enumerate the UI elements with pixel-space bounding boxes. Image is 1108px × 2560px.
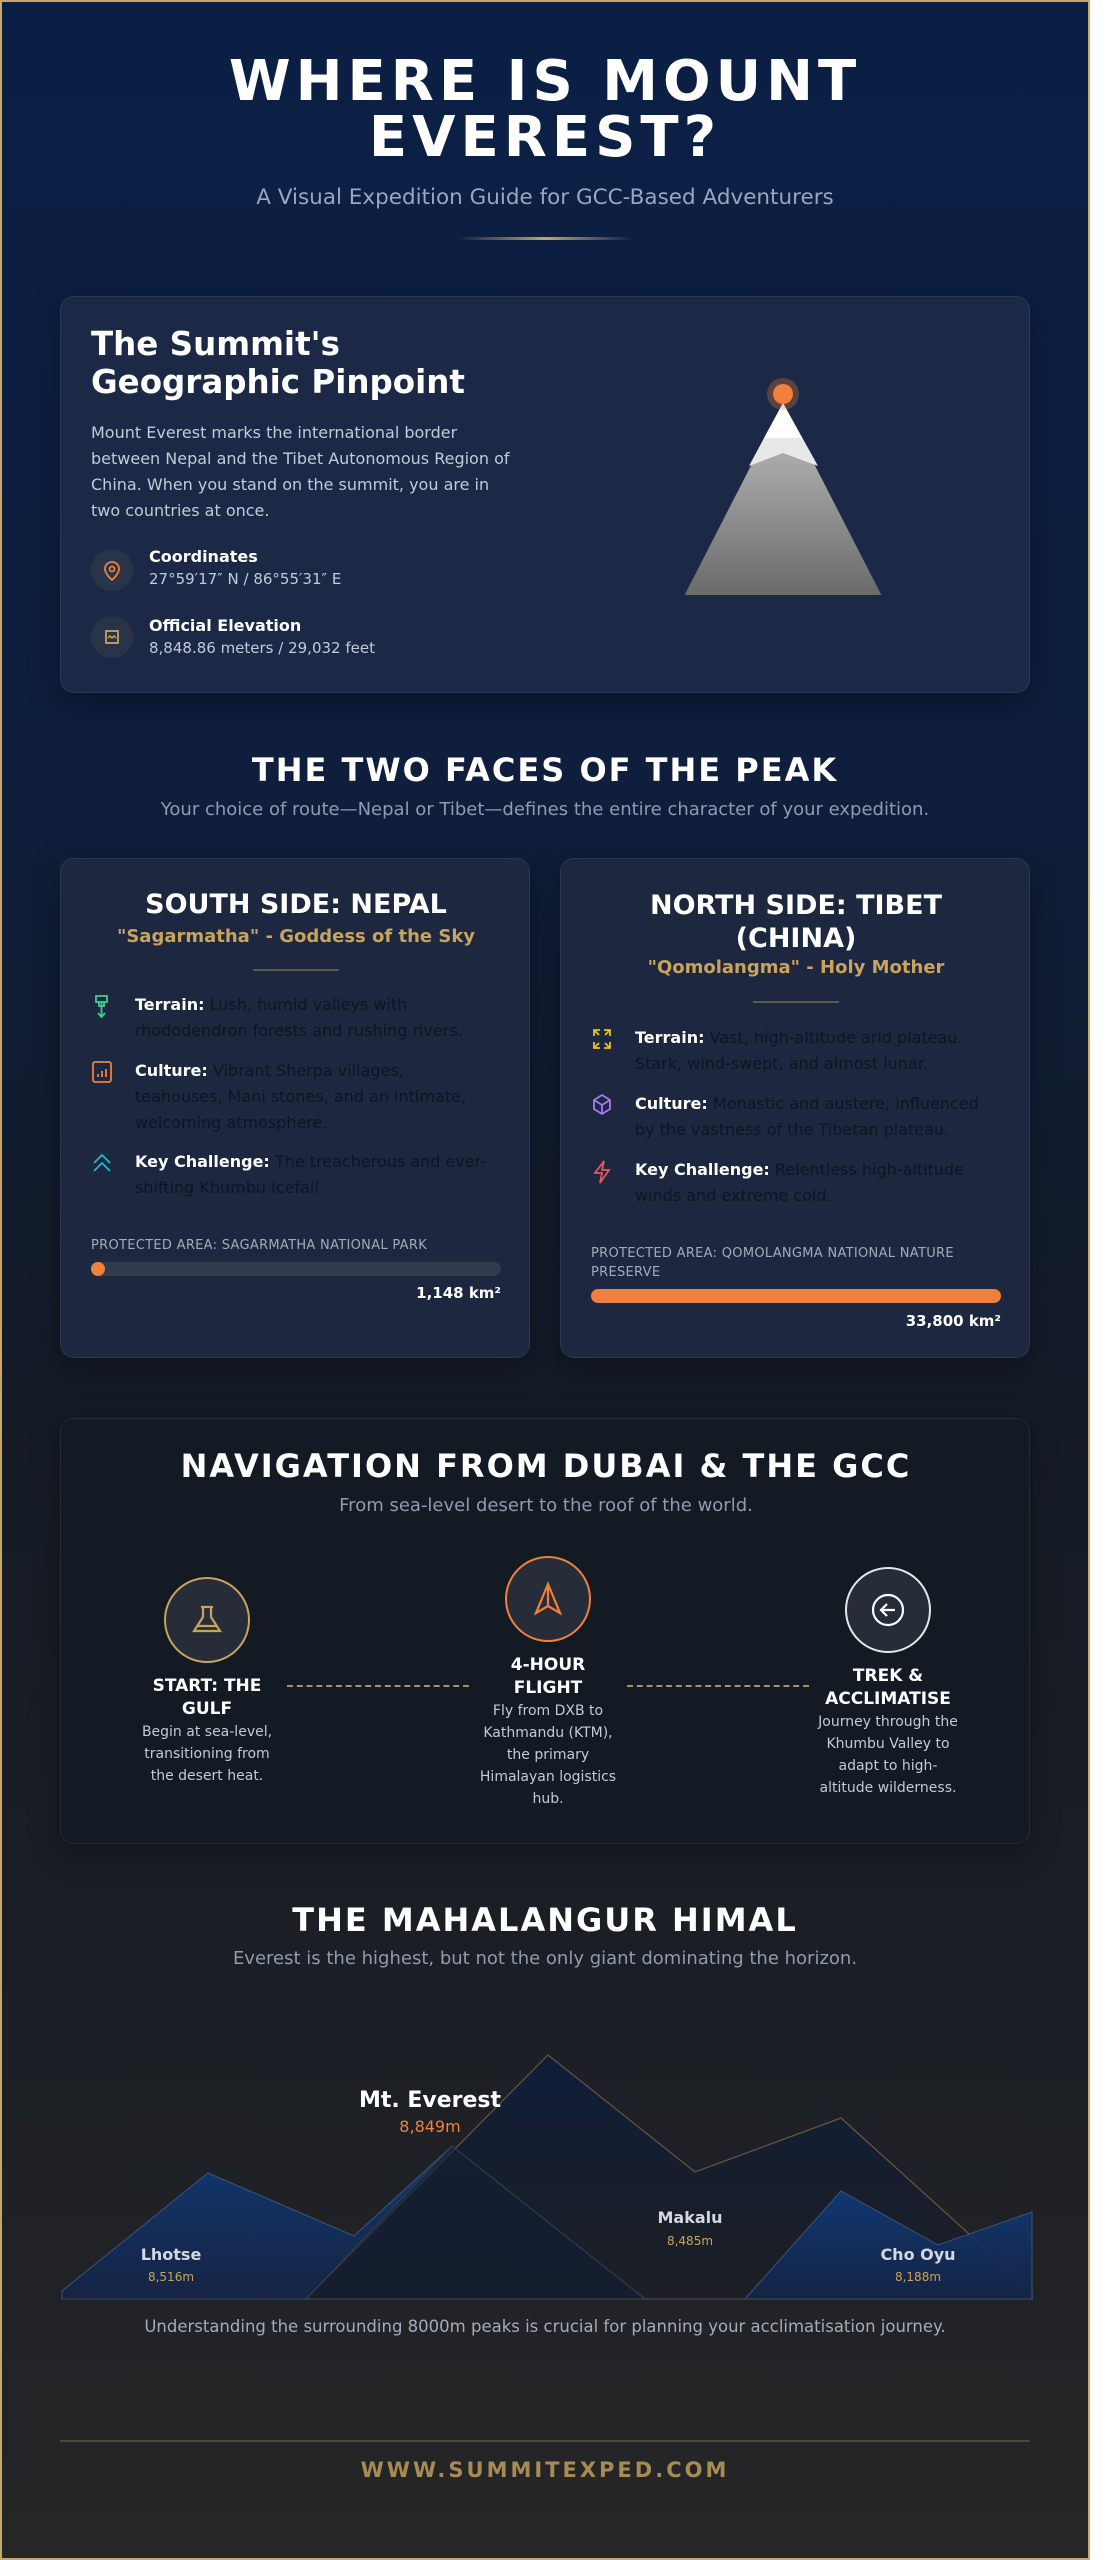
- heading: Geographic Pinpoint: [91, 363, 465, 401]
- heading: [91, 325, 465, 401]
- step: start the gulf: START: THE GULF: [153, 1676, 261, 1719]
- heading: The Summit's: [91, 325, 340, 363]
- peak: makalu: [306, 2146, 645, 2299]
- icon: elevation: [91, 616, 133, 658]
- elevation: Official Elevation: [149, 616, 301, 635]
- label: makalu: [657, 2208, 723, 2248]
- item: terrain: Terrain: Vast, high-altitude arid plateau. Stark, wind-swept, and almost lunar.: [635, 1028, 963, 1073]
- panel: north side tibet: "Qomolangma" - Holy Mother: [648, 957, 944, 978]
- elevation: [91, 616, 375, 658]
- coordinates: [91, 547, 341, 591]
- peak: lhotse: [62, 2146, 645, 2299]
- item: culture: Culture: Monastic and austere, influenced by the vastness of the Tibetan plateau.: [635, 1094, 979, 1139]
- label: everest: 8,849m: [399, 2117, 461, 2136]
- footer url: WWW.SUMMITEXPED.COM: [361, 2458, 729, 2482]
- title: WHERE IS MOUNT: [229, 49, 861, 114]
- heading: mahalangur himal: THE MAHALANGUR HIMAL: [292, 1901, 798, 1939]
- item: key challenge: Key Challenge: The treacherous and ever-shifting Khumbu Icefall.: [135, 1152, 486, 1197]
- text block: Mount Everest marks the international border between Nepal and the Tibet Autonomous Region of China. When you stand on the summit, you are in two countries at once.: [91, 423, 510, 520]
- step: start the gulf: Begin at sea-level, transitioning from the desert heat.: [142, 1724, 272, 1784]
- heading: two faces: THE TWO FACES OF THE PEAK: [252, 751, 838, 789]
- heading: NORTH SIDE: TIBET: [650, 890, 942, 921]
- elevation: 8,848.86 meters / 29,032 feet: [149, 639, 375, 657]
- subtitle: two faces: Your choice of route—Nepal or Tibet—defines the entire character of your expedition.: [161, 799, 929, 820]
- label: cho oyu: 8,188m: [895, 2270, 941, 2284]
- panel: north side tibet: [560, 858, 1030, 1358]
- icon: pin: [91, 549, 133, 591]
- panel: geographic pinpoint: [60, 296, 1030, 693]
- heading: NAVIGATION FROM DUBAI & THE GCC: [181, 1447, 911, 1485]
- label: everest: [359, 2088, 502, 2136]
- subtitle: mahalangur: Everest is the highest, but not the only giant dominating the horizon.: [233, 1948, 857, 1969]
- heading: [650, 890, 942, 954]
- protected area bar: 33,800 km²: [906, 1312, 1001, 1330]
- label: cho oyu: Cho Oyu: [880, 2245, 956, 2264]
- protected area bar: 1,148 km²: [416, 1284, 501, 1302]
- protected area bar: PROTECTED AREA: SAGARMATHA NATIONAL PARK: [91, 1238, 427, 1253]
- label: makalu: Makalu: [657, 2208, 723, 2227]
- chart: mountain range: [62, 2054, 1033, 2300]
- item: key challenge: Key Challenge: Relentless high-altitude winds and extreme cold.: [635, 1160, 964, 1205]
- item: terrain: Terrain: Lush, humid valleys with rhododendron forests and rushing rivers.: [135, 995, 463, 1040]
- peak: everest: [306, 2055, 1032, 2299]
- label: everest: Mt. Everest: [359, 2088, 502, 2113]
- title: [229, 49, 861, 170]
- label: lhotse: 8,516m: [148, 2270, 194, 2284]
- arrow: dashed connector 1: [287, 1685, 469, 1687]
- label: lhotse: [141, 2245, 201, 2284]
- coordinates: Coordinates: [149, 547, 258, 566]
- heading: SOUTH SIDE: NEPAL: [145, 889, 447, 920]
- panel: navigation from dubai: From sea-level desert to the roof of the world.: [339, 1495, 753, 1516]
- protected area bar: PROTECTED AREA: QOMOLANGMA NATIONAL NATURE PRESERVE: [591, 1246, 954, 1280]
- label: cho oyu: [880, 2245, 956, 2284]
- step: 4-hour flight: Fly from DXB to Kathmandu (KTM), the primary Himalayan logistics hub.: [480, 1703, 616, 1807]
- panel: south side nepal: [60, 858, 530, 1358]
- step: trek and acclimatise: TREK & ACCLIMATISE: [825, 1666, 951, 1709]
- title: EVEREST?: [369, 105, 721, 170]
- step: 4-hour flight: 4-HOUR FLIGHT: [511, 1655, 585, 1698]
- label: lhotse: Lhotse: [141, 2245, 201, 2264]
- label: makalu: 8,485m: [667, 2234, 713, 2248]
- coordinates: 27°59′17″ N / 86°55′31″ E: [149, 570, 341, 588]
- step: trek and acclimatise: [817, 1567, 958, 1796]
- step: trek and acclimatise: Journey through the Khumbu Valley to adapt to high-altitude wilderness.: [818, 1714, 958, 1796]
- icon: mountain illustration: [684, 378, 882, 595]
- item: culture: Culture: Vibrant Sherpa villages, teahouses, Mani stones, and an intimate, welcoming atmosphere.: [135, 1061, 466, 1132]
- step: start the gulf: [142, 1577, 272, 1784]
- caption: Understanding the surrounding 8000m peaks is crucial for planning your acclimatisation journey.: [144, 2317, 946, 2336]
- arrow: dashed connector 2: [627, 1685, 809, 1687]
- protected area bar: [591, 1246, 1001, 1330]
- subtitle: A Visual Expedition Guide for GCC-Based Adventurers: [256, 185, 834, 210]
- panel: navigation from dubai: [60, 1418, 1030, 1844]
- panel: south side nepal: "Sagarmatha" - Goddess of the Sky: [117, 926, 475, 947]
- protected area bar: [91, 1238, 501, 1302]
- peak: cho oyu: [745, 2191, 1032, 2299]
- heading: (CHINA): [736, 923, 856, 954]
- step: 4-hour flight: [480, 1556, 616, 1807]
